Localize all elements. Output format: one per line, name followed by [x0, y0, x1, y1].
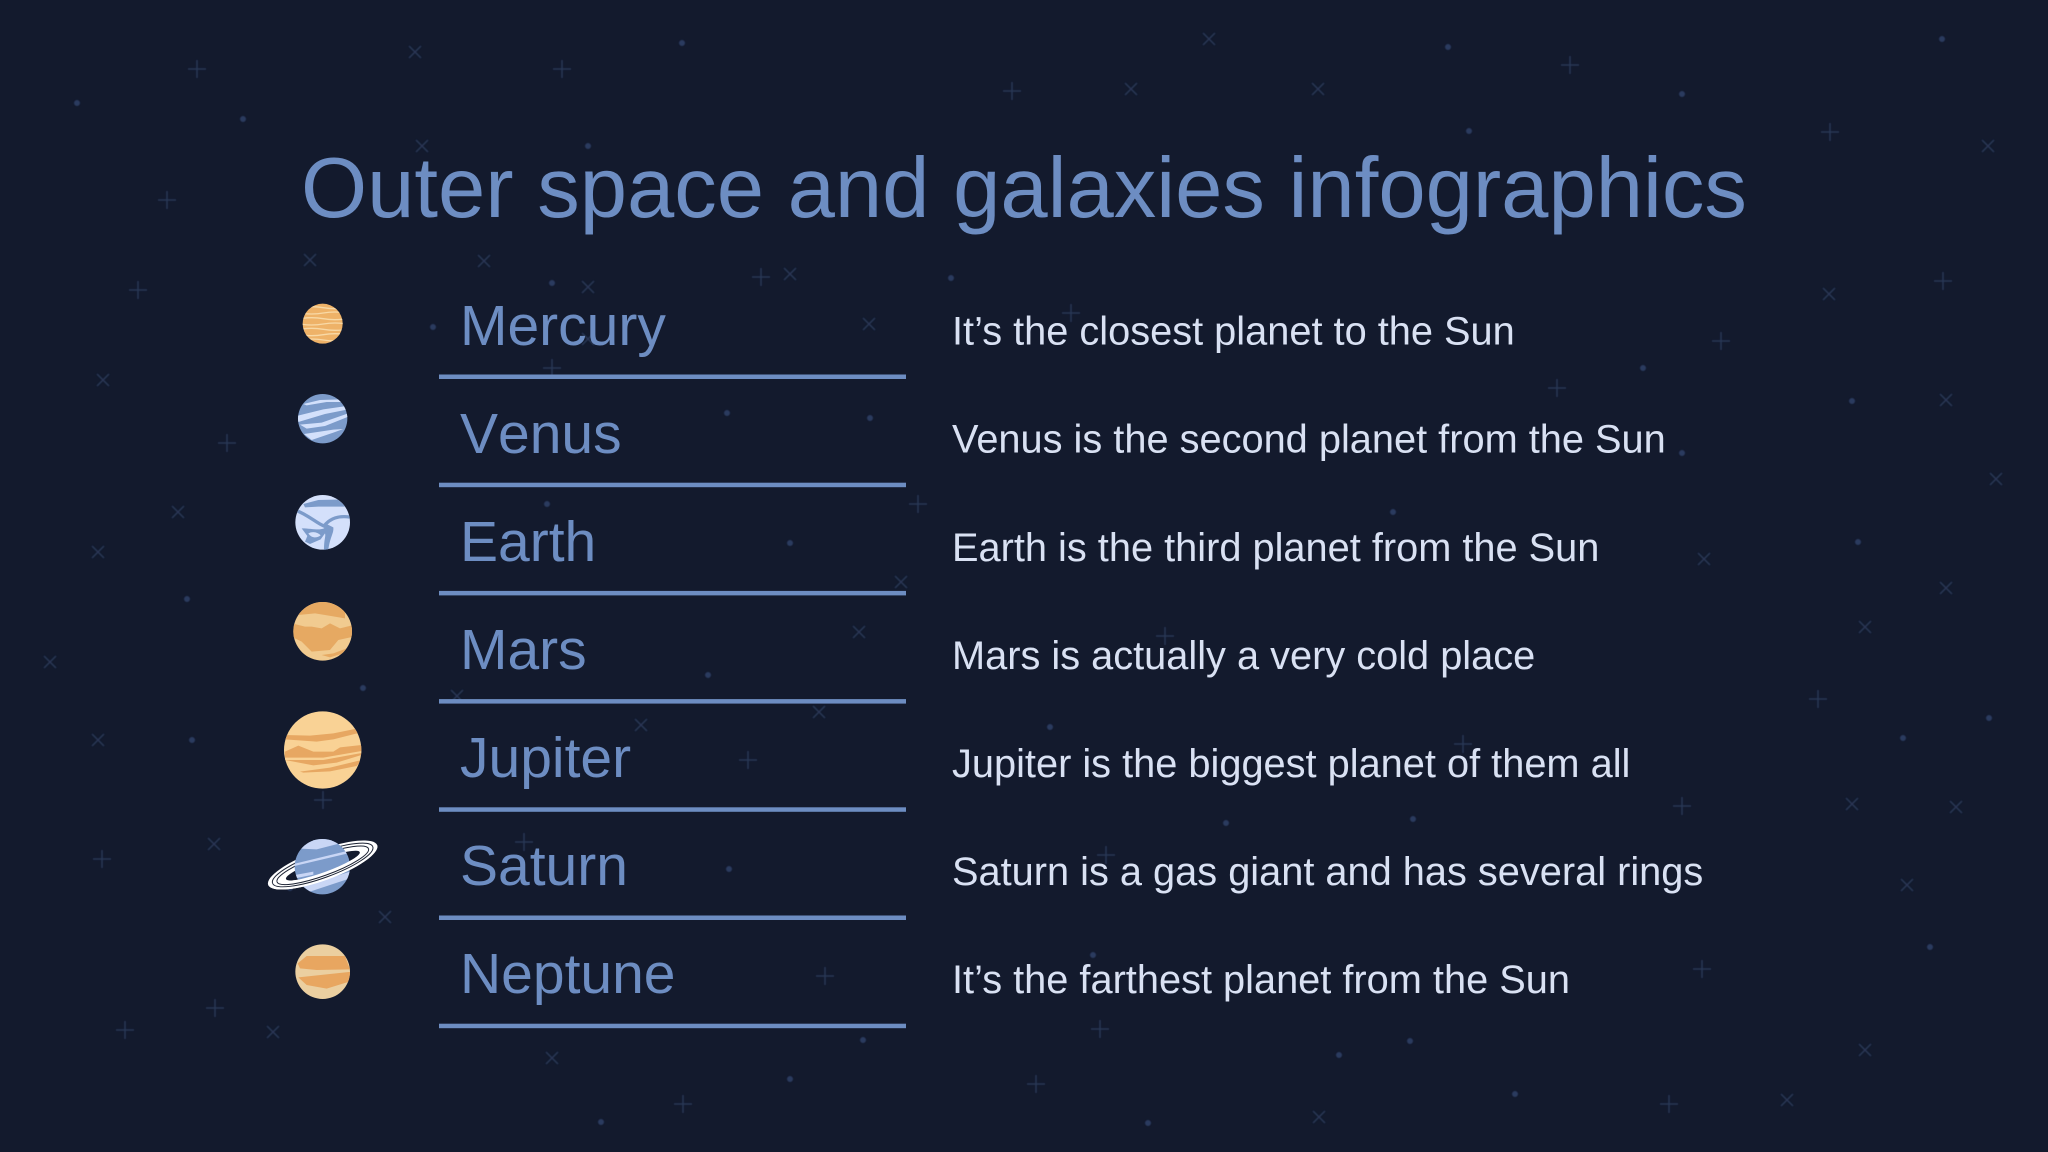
name: Jupiter: Jupiter [460, 726, 631, 790]
divider: Mercury [439, 374, 906, 379]
icon: Earth [295, 495, 352, 550]
description: Earth: Earth is the third planet from the Sun [952, 526, 1599, 570]
divider: Neptune [439, 1024, 906, 1028]
description: Mercury: It’s the closest planet to the Sun [952, 310, 1515, 354]
divider: Saturn [439, 916, 906, 920]
description: Jupiter: Jupiter is the biggest planet of them all [952, 742, 1630, 786]
name: Neptune: Neptune [460, 942, 676, 1006]
description: Venus: Venus is the second planet from the Sun [952, 418, 1666, 462]
description: Neptune: It’s the farthest planet from the Sun [952, 958, 1570, 1002]
icon: Jupiter [284, 711, 362, 789]
divider: Mars [439, 699, 906, 704]
row: Saturn [263, 831, 1703, 920]
icon: Venus [297, 394, 348, 443]
name: Earth: Earth [460, 510, 596, 574]
divider: Venus [439, 483, 906, 487]
icon: Neptune [295, 944, 352, 999]
description: Saturn: Saturn is a gas giant and has several rings [952, 850, 1703, 894]
name: Mars: Mars [460, 618, 587, 682]
name: Venus: Venus [460, 402, 622, 466]
icon: Mars [292, 600, 353, 661]
icon: Mercury [302, 304, 343, 344]
row: Mars [292, 600, 1535, 704]
description: Mars: Mars is actually a very cold place [952, 634, 1535, 678]
divider: Earth [439, 591, 906, 595]
divider: Jupiter [439, 807, 906, 812]
name: Mercury: Mercury [460, 294, 666, 358]
row: Venus [297, 394, 1666, 487]
row: Earth [295, 495, 1599, 595]
icon: Saturn [268, 839, 378, 894]
row: Neptune [295, 942, 1570, 1028]
name: Saturn: Saturn [460, 834, 628, 898]
row: Mercury [302, 304, 1512, 379]
row: Jupiter [284, 711, 1630, 812]
title: Outer space and galaxies infographics [301, 141, 1747, 236]
